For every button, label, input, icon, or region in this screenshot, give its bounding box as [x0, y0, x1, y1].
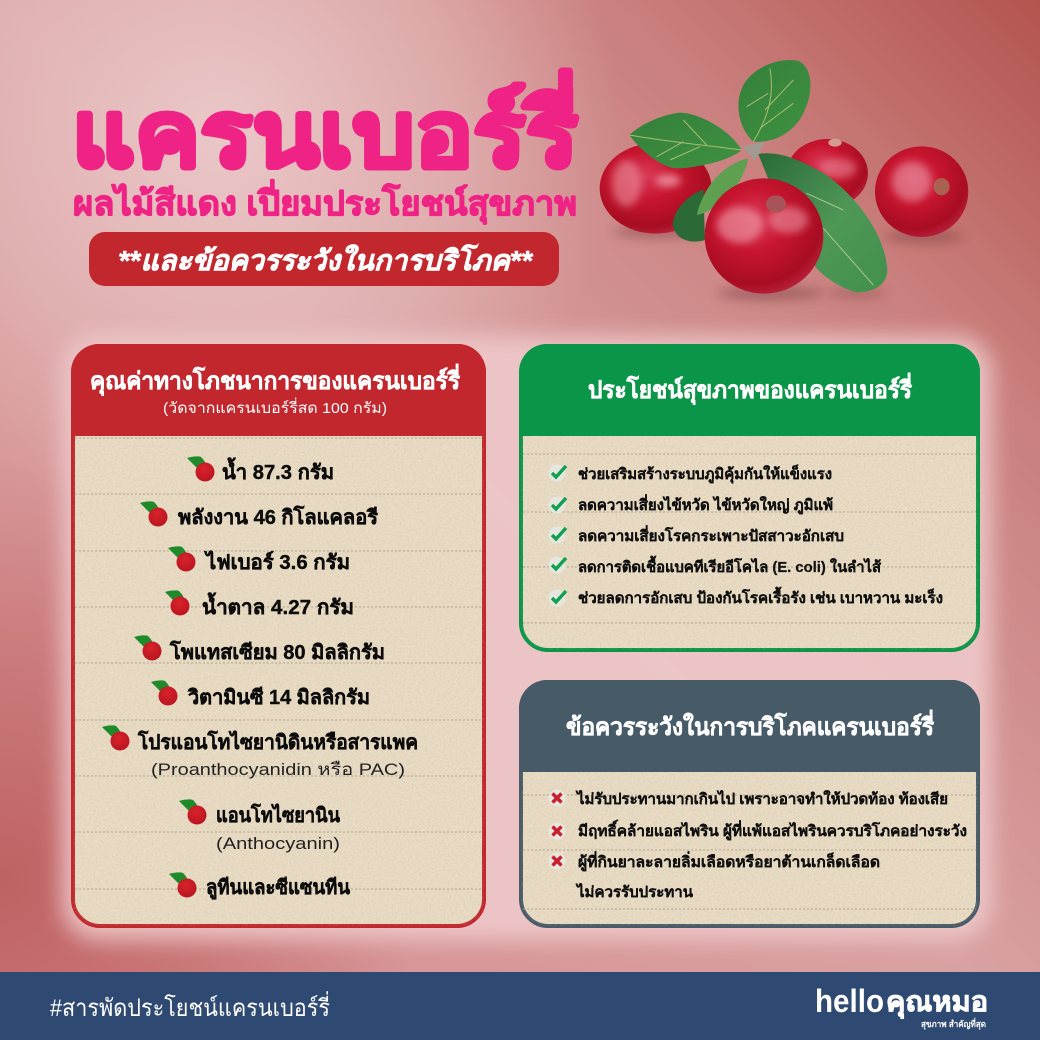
item: anthocyanin: (Anthocyanin)	[216, 834, 340, 853]
benefit 5: ช่วยลดการอักเสบ ป้องกันโรคเรื้อรัง เช่น เบาหวาน มะเร็ง	[578, 586, 943, 607]
item: potassium: โพแทสเซียม 80 มิลลิกรัม	[169, 640, 385, 664]
title: แครนเบอร์รี่	[72, 69, 578, 186]
logo	[815, 983, 988, 1030]
benefit 1: ช่วยเสริมสร้างระบบภูมิคุ้มกันให้แข็งแรง	[578, 464, 832, 484]
panel header: precautions	[519, 680, 980, 772]
item: anthocyanin	[179, 799, 340, 853]
paper texture: nutrition	[73, 436, 484, 926]
paper texture: precautions	[521, 772, 978, 926]
subheading: nutrition: (วัดจากแครนเบอร์รี่สด 100 กรัม)	[163, 397, 387, 417]
cranberries and leaves illustration	[600, 60, 968, 301]
subtitle: ผลไม้สีแดง เปี่ยมประโยชน์สุขภาพ	[73, 179, 577, 225]
item: vitamin C: วิตามินซี 14 มิลลิกรัม	[187, 686, 370, 709]
benefit 3: ลดความเสี่ยงโรคกระเพาะปัสสาวะอักเสบ	[578, 525, 844, 545]
footer bar	[0, 972, 1040, 1040]
panel: precautions	[519, 680, 980, 926]
hashtag: #สารพัดประโยชน์แครนเบอร์รี่	[50, 991, 330, 1022]
item: anthocyanin: แอนโทไซยานิน	[216, 803, 340, 827]
item: lutein and zeaxanthin: ลูทีนและซีแซนทีน	[206, 876, 350, 901]
item: water	[187, 456, 334, 484]
benefit 4: ลดการติดเชื้อแบคทีเรียอีโคไล (E. coli) ในลำไส้	[578, 555, 882, 576]
panel header: nutrition	[71, 344, 486, 436]
heading: benefits: ประโยชน์สุขภาพของแครนเบอร์รี่	[588, 372, 912, 406]
benefit 2: ลดความเสี่ยงไข้หวัด ไข้หวัดใหญ่ ภูมิแพ้	[578, 494, 833, 515]
item: sugar: น้ำตาล 4.27 กรัม	[202, 592, 354, 619]
logo: คุณหมอ	[886, 986, 988, 1019]
panel: health benefits	[519, 344, 980, 650]
item: energy	[140, 501, 378, 529]
logo: สุขภาพ สำคัญที่สุด	[921, 1017, 986, 1030]
item: proanthocyanidin	[102, 725, 418, 779]
precaution 3	[548, 851, 880, 901]
item: lutein and zeaxanthin	[169, 872, 350, 901]
item: sugar	[165, 590, 354, 619]
item: water: น้ำ 87.3 กรัม	[222, 457, 334, 484]
item: potassium	[134, 635, 385, 664]
heading: precautions: ข้อควรระวังในการบริโภคแครนเบอร์รี่	[566, 709, 934, 741]
item: fiber	[168, 546, 350, 574]
panel header: benefits	[519, 344, 980, 436]
caution pill: **และข้อควรระวังในการบริโภค**	[118, 243, 533, 276]
item: fiber: ไฟเบอร์ 3.6 กรัม	[204, 550, 350, 574]
heading: nutrition: คุณค่าทางโภชนาการของแครนเบอร์รี่	[90, 363, 460, 397]
item: proanthocyanidin: โปรแอนโทไซยานิดินหรือสารแพค	[137, 730, 418, 754]
precaution 1: ไม่รับประทานมากเกินไป เพราะอาจทำให้ปวดท้อง ท้องเสีย	[575, 789, 948, 808]
precaution 2: มีฤทธิ์คล้ายแอสไพริน ผู้ที่แพ้แอสไพรินควรบริโภคอย่างระวัง	[578, 819, 967, 841]
item: energy: พลังงาน 46 กิโลแคลอรี	[178, 505, 378, 529]
paper texture: benefits	[521, 436, 978, 650]
item: vitamin C	[151, 680, 370, 709]
precaution 3: ผู้ที่กินยาละลายลิ่มเลือดหรือยาต้านเกล็ดเลือด	[578, 851, 880, 872]
item: proanthocyanidin: (Proanthocyanidin หรือ PAC)	[151, 760, 405, 779]
caution pill	[89, 232, 559, 286]
logo: hello	[815, 983, 884, 1019]
panel: nutrition	[71, 344, 486, 926]
precaution 3: ไม่ควรรับประทาน	[575, 882, 694, 901]
